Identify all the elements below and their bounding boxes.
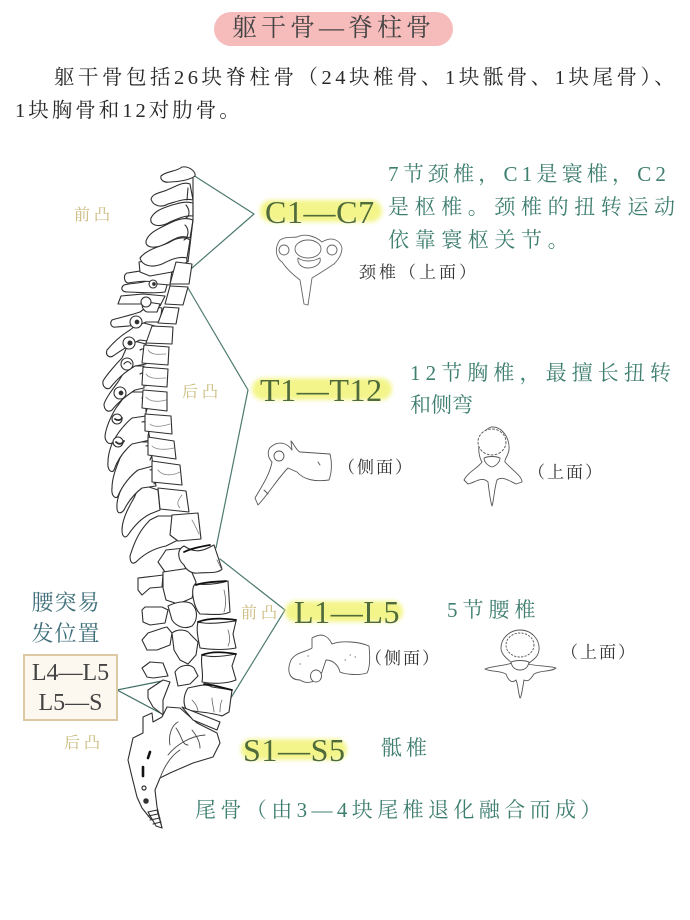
herniation box — [23, 654, 118, 721]
thoracic vertebrae: spinous processes — [103, 268, 178, 563]
lumbar vertebrae — [138, 545, 236, 716]
cervical caption: 颈椎（上面） — [359, 263, 479, 282]
thoracic side caption: （侧面） — [338, 458, 414, 477]
pedicle rings — [149, 280, 157, 288]
lumbar vertebra side view — [289, 635, 370, 682]
sacrum description: 骶椎 — [381, 736, 431, 760]
label: forward curve, lumbar: 前 凸 — [241, 605, 277, 622]
thoracic description — [410, 361, 676, 417]
title: 躯干骨—脊柱骨 — [232, 15, 435, 42]
title — [214, 12, 453, 46]
cervical vertebrae — [139, 167, 195, 276]
cervical description: 是枢椎。颈椎的扭转运动 — [388, 195, 681, 219]
herniation heading: 发位置 — [31, 621, 100, 646]
thoracic description: 12节胸椎，最擅长扭转 — [410, 361, 676, 385]
lumbar side caption: （侧面） — [365, 649, 441, 668]
lumbar vertebra top view — [485, 630, 556, 698]
herniation box: L4—L5 — [32, 660, 109, 686]
intro text: 1块胸骨和12对肋骨。 — [15, 100, 243, 122]
cervical vertebra top view — [276, 235, 342, 305]
label: forward curve, cervical: 前 凸 — [74, 207, 110, 224]
cervical description — [388, 162, 681, 252]
herniation heading — [31, 590, 100, 646]
thoracic vertebra top view — [464, 427, 522, 506]
cervical description: 7节颈椎，C1是寰椎，C2 — [388, 162, 670, 186]
thoracic vertebra side view — [255, 441, 331, 505]
thoracic top caption: （上面） — [528, 463, 604, 482]
herniation heading: 腰突易 — [31, 590, 100, 615]
intro text — [15, 66, 678, 122]
L1-L5 range label: L1—L5 — [294, 594, 400, 630]
lumbar top caption: （上面） — [561, 643, 637, 662]
S1-S5 range label: S1—S5 — [243, 732, 346, 768]
lumbar description: 5节腰椎 — [447, 598, 540, 622]
cervical description: 依靠寰枢关节。 — [388, 228, 574, 252]
thoracic vertebral bodies — [142, 262, 201, 541]
coccyx description: 尾骨（由3—4块尾椎退化融合而成） — [195, 798, 606, 822]
thoracic description: 和侧弯 — [410, 393, 473, 417]
T1-T12 range label: T1—T12 — [260, 372, 383, 408]
connector lines — [117, 175, 285, 715]
intro text: 躯干骨包括26块脊柱骨（24块椎骨、1块骶骨、1块尾骨）、 — [54, 67, 678, 89]
label: backward curve, thoracic: 后 凸 — [182, 384, 218, 401]
C1-C7 range label: C1—C7 — [265, 194, 375, 230]
herniation box: L5—S — [38, 690, 102, 716]
sacrum and coccyx — [128, 707, 220, 828]
label: backward curve, sacral: 后 凸 — [64, 735, 100, 752]
